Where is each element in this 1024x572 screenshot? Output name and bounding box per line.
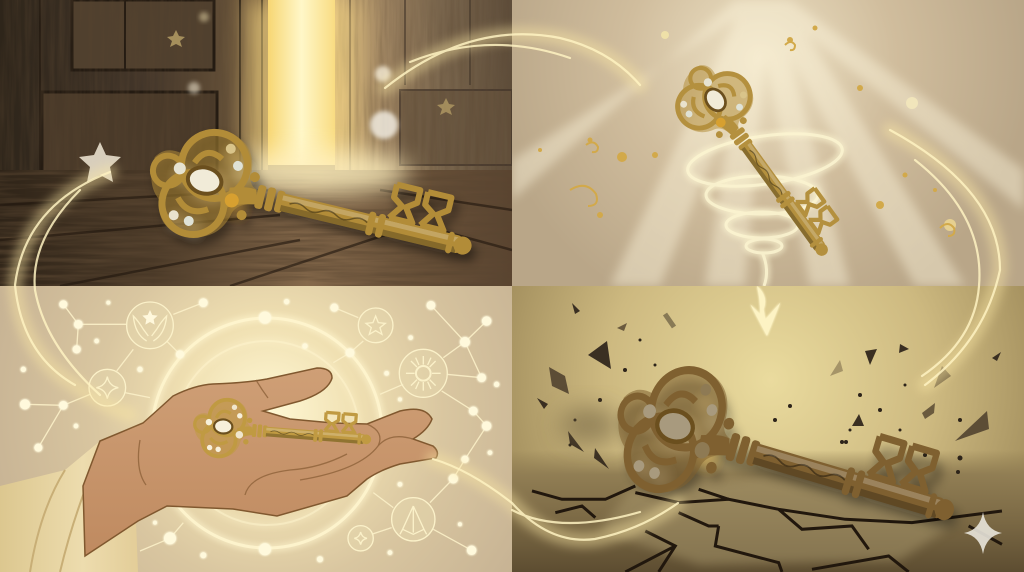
open hand — [83, 368, 437, 556]
floating golden key — [675, 65, 840, 256]
arrow from spiral — [750, 286, 780, 336]
icon: small star — [348, 526, 373, 551]
light rays — [512, 0, 1024, 286]
panel: hand holding key — [0, 286, 512, 572]
flying shards — [537, 303, 1001, 469]
golden curls — [570, 42, 954, 236]
icon: four point star — [89, 369, 126, 406]
golden key on palm — [193, 398, 372, 458]
network nodes — [20, 298, 499, 562]
bright door gap — [248, 0, 355, 170]
floating orbs and stars — [79, 12, 455, 182]
left door — [0, 0, 268, 175]
icon: hands and star — [127, 302, 173, 349]
panel: broken key on cracked earth — [512, 286, 1024, 572]
spiral ribbon — [684, 125, 846, 286]
glowing rings — [152, 318, 382, 548]
panel: wooden door and key — [0, 0, 512, 309]
wooden floor — [0, 150, 512, 286]
constellation network — [25, 303, 487, 551]
icon: praying hands — [392, 498, 435, 541]
golden sparkles — [538, 26, 956, 231]
icon: sun — [399, 349, 447, 397]
icon: star burst — [358, 308, 393, 343]
worn large key — [616, 366, 962, 532]
cracked ground — [512, 450, 1024, 572]
panel: key in rays of light — [512, 0, 1024, 286]
dust particles — [568, 338, 962, 474]
sparkle — [964, 512, 1002, 554]
golden key on floor — [150, 128, 478, 265]
right door — [335, 0, 512, 172]
sleeve — [0, 441, 138, 572]
